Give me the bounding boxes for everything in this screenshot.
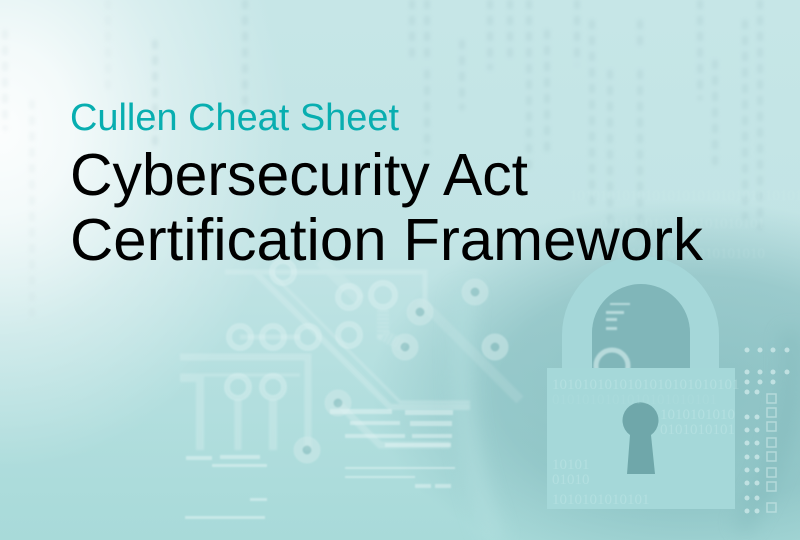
- keyhole: [623, 402, 659, 474]
- main title line 2: Certification Framework: [70, 207, 703, 273]
- circuit board traces: [180, 260, 520, 450]
- binary band: 1010101010101010101010101010101: [570, 188, 800, 204]
- binary overlay: 10101: [552, 457, 590, 473]
- circuit board pads: [227, 261, 395, 398]
- subtitle: Cullen Cheat Sheet: [70, 97, 399, 139]
- padlock opening: [592, 284, 690, 368]
- circuit dots right of padlock: [744, 348, 790, 514]
- checkbox column: [767, 394, 776, 512]
- padlock shackle: [562, 256, 719, 368]
- binary overlay: 0101010101010101010101: [552, 392, 717, 408]
- padlock body: [547, 368, 735, 509]
- padlock opening details: [596, 303, 630, 382]
- binary overlay: 01010: [552, 472, 590, 488]
- main title line 1: Cybersecurity Act: [70, 142, 528, 208]
- binary overlay: 1010101010: [660, 407, 735, 423]
- binary band: [555, 188, 800, 262]
- binary band: 1010101010101010101010101010: [555, 246, 765, 262]
- title block: [70, 97, 703, 273]
- binary overlay: 1010101010101010101010101: [552, 377, 740, 393]
- binary overlay: 0101010101: [660, 422, 735, 438]
- padlock: [547, 256, 740, 509]
- binary band: 0101010101010101010101: [600, 216, 765, 232]
- binary overlay: [552, 377, 740, 508]
- binary overlay: 1010101010101: [552, 492, 650, 508]
- binary matrix columns: [5, 0, 760, 320]
- dark-centred circuit pads: [298, 283, 504, 459]
- faint data text lines: [185, 409, 455, 519]
